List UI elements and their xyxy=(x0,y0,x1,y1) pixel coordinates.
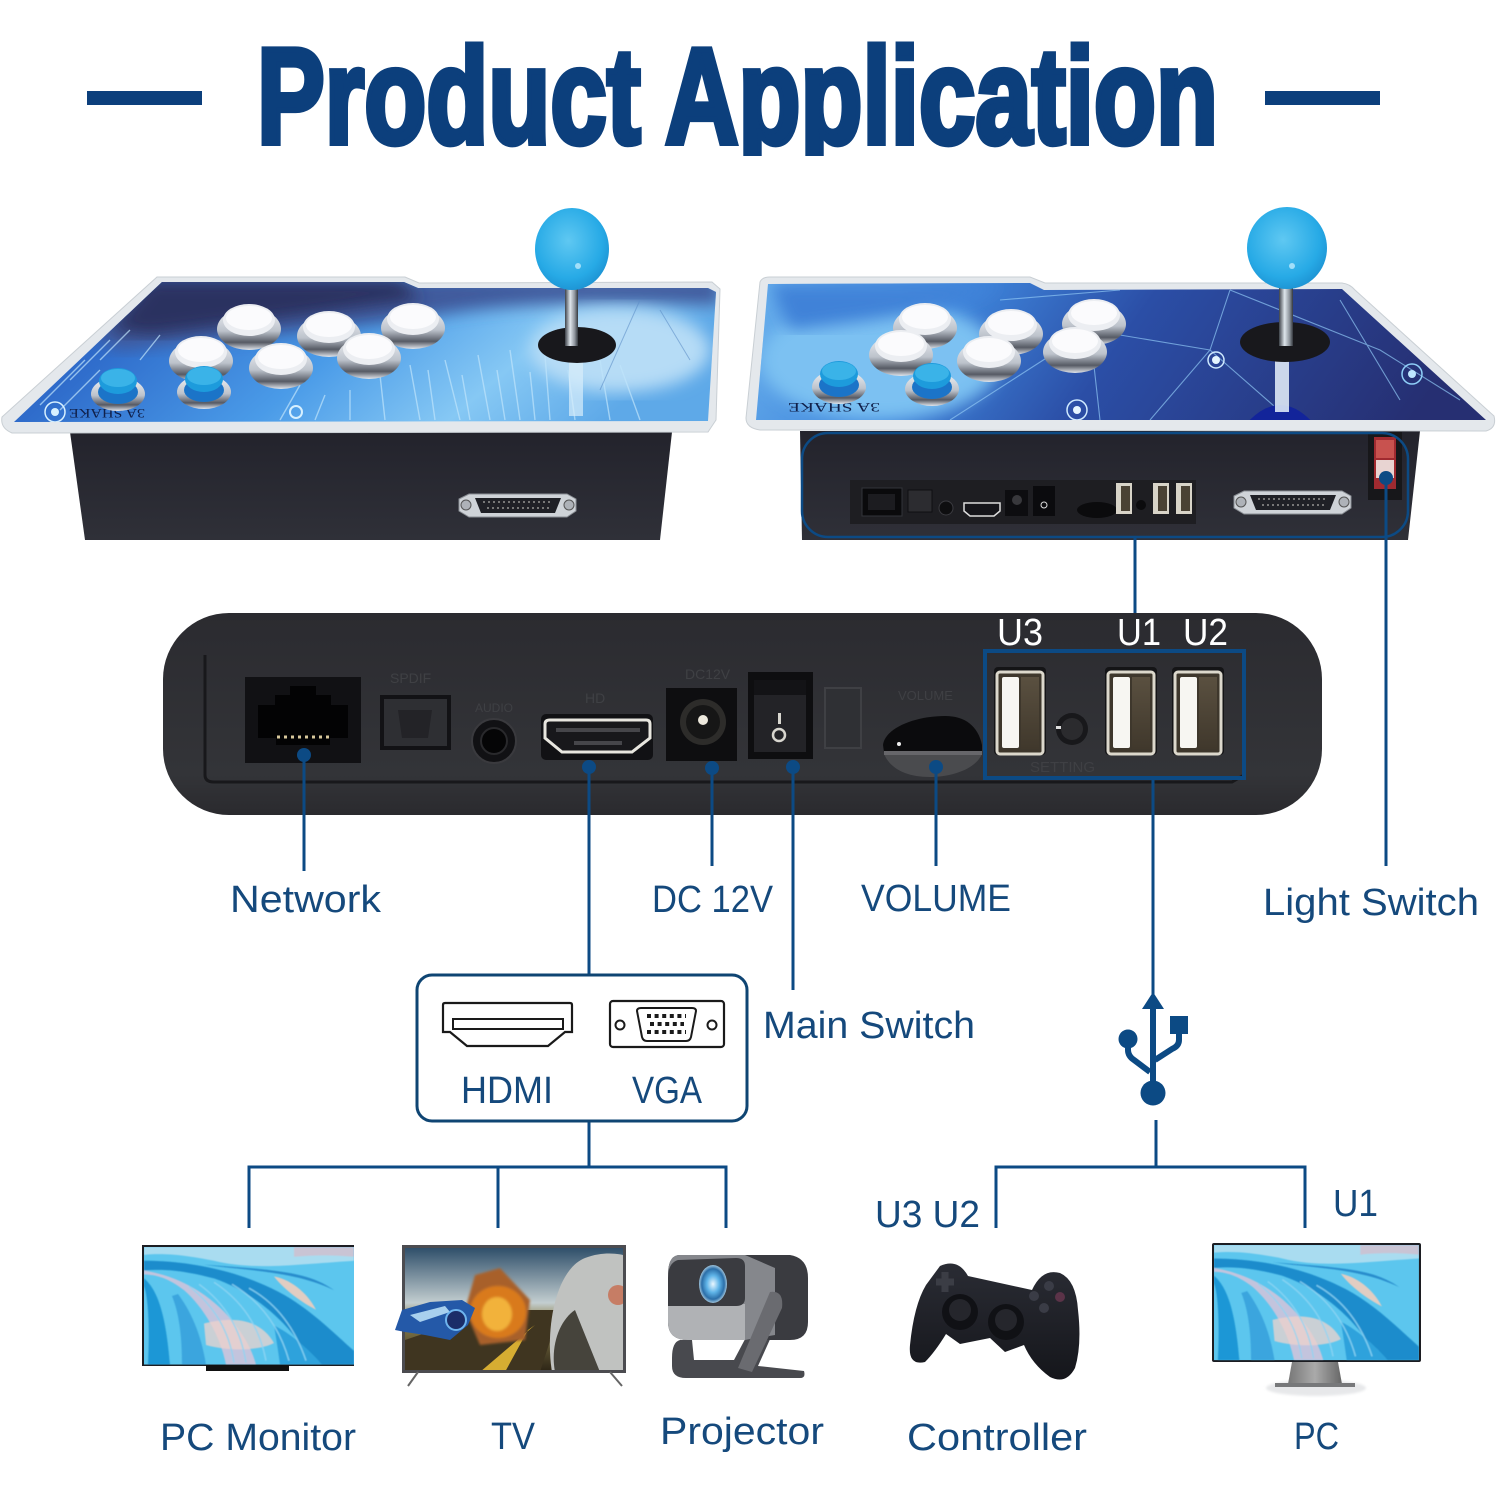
engraved port labels: HD xyxy=(585,690,605,706)
joystick port xyxy=(1234,491,1351,514)
top plate xyxy=(746,270,1496,431)
label: Main Switch: Main Switch xyxy=(763,1005,975,1047)
label: DC 12V: DC 12V xyxy=(652,879,774,921)
USB port U2 xyxy=(1172,667,1224,755)
blank indicator xyxy=(825,688,861,748)
device: game controller xyxy=(910,1264,1079,1380)
label: U3 U2: U3 U2 xyxy=(875,1194,980,1236)
USB label U1: U1 xyxy=(1117,612,1161,654)
top plate xyxy=(0,270,730,433)
icon: HDMI connector xyxy=(443,1003,572,1046)
DC power port xyxy=(666,688,737,761)
left arcade console xyxy=(0,208,730,540)
network port xyxy=(245,677,361,763)
label: Projector: Projector xyxy=(660,1411,824,1453)
white action buttons xyxy=(169,303,445,389)
miniature port panel xyxy=(850,480,1196,524)
USB port U3 xyxy=(994,667,1046,755)
title xyxy=(87,42,1380,156)
label: Light Switch: Light Switch xyxy=(1263,882,1479,924)
label: TV: TV xyxy=(491,1416,536,1458)
white action buttons xyxy=(869,299,1126,382)
device: PC xyxy=(1212,1243,1421,1396)
connector lines and dots xyxy=(249,471,1393,1228)
reversed brand text: 3A SHAKE xyxy=(69,406,145,421)
device: projector xyxy=(668,1255,808,1378)
rear port panel close-up xyxy=(163,612,1322,815)
joystick port xyxy=(459,494,576,517)
reversed brand text: 3A SHAKE xyxy=(788,400,880,415)
device: TV xyxy=(395,1245,628,1386)
engraved port labels xyxy=(390,666,1095,776)
label: VGA: VGA xyxy=(632,1070,703,1112)
blue start buttons xyxy=(91,366,231,411)
audio jack xyxy=(472,719,516,763)
label: Controller: Controller xyxy=(907,1417,1087,1459)
engraved port labels: SETTING xyxy=(1030,759,1095,776)
engraved port labels: SPDIF xyxy=(390,670,431,686)
joystick xyxy=(535,208,616,416)
engraved port labels: VOLUME xyxy=(898,688,953,703)
icon: USB trident xyxy=(1118,992,1188,1106)
blue start buttons xyxy=(812,361,959,406)
optical audio port xyxy=(380,695,451,750)
engraved port labels: DC12V xyxy=(685,666,731,682)
right arcade console xyxy=(746,207,1496,540)
console body xyxy=(70,432,672,540)
console body xyxy=(800,431,1420,540)
HDMI port xyxy=(541,714,653,760)
joystick xyxy=(1240,207,1330,412)
device: PC monitor xyxy=(142,1245,354,1371)
volume wheel xyxy=(883,716,982,777)
label: HDMI: HDMI xyxy=(461,1070,553,1112)
engraved port labels: AUDIO xyxy=(475,701,513,715)
label: U1: U1 xyxy=(1333,1183,1378,1225)
USB label U3: U3 xyxy=(997,612,1043,654)
USB group outline xyxy=(985,651,1244,778)
setting knob xyxy=(1056,713,1088,745)
USB label U2: U2 xyxy=(1183,612,1228,654)
label: Network: Network xyxy=(230,879,382,921)
video output box xyxy=(417,975,747,1121)
panel housing xyxy=(163,613,1322,815)
main rocker switch xyxy=(748,672,813,759)
label: PC Monitor: PC Monitor xyxy=(160,1417,356,1459)
icon: VGA connector xyxy=(610,1001,724,1047)
callout outline around rear ports xyxy=(802,433,1408,537)
label: PC: PC xyxy=(1294,1416,1339,1458)
label: VOLUME: VOLUME xyxy=(861,878,1011,920)
USB port U1 xyxy=(1105,667,1157,755)
light switch xyxy=(1368,432,1402,500)
HDMI connector slot xyxy=(453,1019,563,1029)
